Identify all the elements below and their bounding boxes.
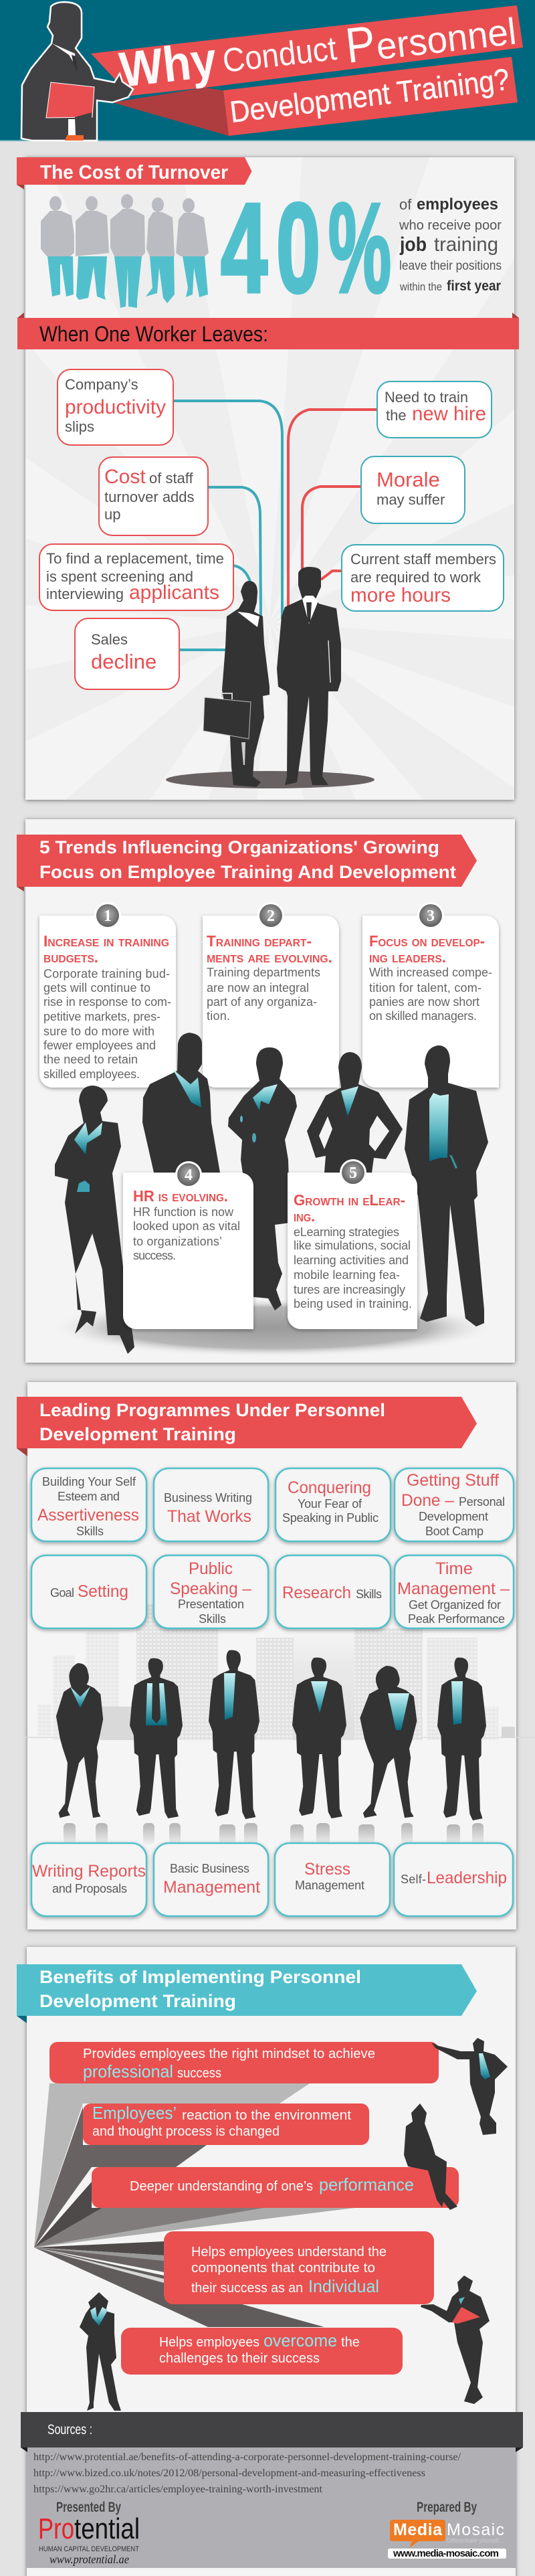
card 5: growth in eLearning: tures are increasingly (294, 1283, 405, 1296)
card 3: focus on developing leaders: tition for talent, com- (369, 981, 481, 995)
number badge 1: 1 (104, 908, 112, 925)
section heading: five trends: Focus on Employee Training And Development (39, 862, 456, 882)
number badge 4: 4 (185, 1167, 193, 1184)
benefit bar: employees reaction (83, 2103, 369, 2145)
callout: more hours: more hours (350, 584, 451, 606)
big statistic: 40 percent: 0 (276, 177, 320, 319)
callout: applicants: applicants (129, 582, 219, 604)
card 4: HR is evolving: to organizations’ (133, 1235, 222, 1248)
benefit bar: individual: Individual (308, 2276, 379, 2296)
figure: woman with folded arms (228, 1047, 297, 1310)
programme tile: stress management: Stress (304, 1860, 350, 1879)
programme tile: getting stuff done: Done – (401, 1491, 454, 1510)
silhouette: woman bottom left (80, 2292, 121, 2411)
figure: man behind cards (142, 1033, 220, 1173)
programme tile: self-leadership: Self- (401, 1873, 426, 1886)
programme tile: conquering fear: Your Fear of (298, 1497, 362, 1511)
card 2: training departments: Training depart- (207, 932, 312, 950)
callout: cost of staff turnover: Cost (104, 466, 146, 488)
programme tile: public speaking (154, 1555, 268, 1628)
card 1: increase in training budgets: skilled employees. (43, 1067, 140, 1081)
stat caption: of (399, 196, 412, 213)
silhouette: man leaning on bar (431, 2038, 508, 2135)
benefit bar: employees reaction: reaction to the environment (182, 2108, 351, 2123)
source links: http://www.bized.co.uk/notes/2012/08/personal-development-and-measuring-effectiveness (33, 2468, 425, 2479)
programme tile: assertiveness: Skills (76, 1525, 104, 1538)
card 4: HR is evolving: looked upon as vital (133, 1219, 240, 1233)
section heading: leading programmes: Leading Programmes Under Personnel (39, 1400, 385, 1420)
card 4: HR is evolving (123, 1161, 253, 1329)
programme tile: goal setting: Goal (50, 1586, 74, 1600)
figure 6 man (437, 1658, 486, 1820)
title text: Conduct (221, 29, 338, 80)
card 1: increase in training budgets: Corporate training bud- (43, 967, 170, 980)
benefit bar: overcome (121, 2328, 403, 2375)
card 2: training departments: ments are evolving. (207, 948, 332, 966)
programme tile: getting stuff done: Development (419, 1510, 488, 1523)
stat caption: within the (399, 280, 442, 293)
number badge 2 (257, 902, 284, 929)
figure: woman hands on hips (307, 1052, 403, 1173)
card 1: increase in training budgets: Increase in training (43, 932, 169, 950)
programme tile: self-leadership: Leadership (427, 1869, 507, 1887)
card 5: growth in eLearning: learning activities and (294, 1254, 409, 1267)
card 5: growth in eLearning: being used in training. (294, 1297, 412, 1310)
callout: productivity: Company’s (65, 376, 138, 393)
card 4: HR is evolving: success. (133, 1249, 176, 1262)
stat caption: who receive poor (399, 218, 502, 233)
programme tile: stress management: Management (295, 1879, 364, 1892)
prepared by logo (388, 2500, 506, 2559)
benefit bar: employees reaction: Employees’ (92, 2103, 177, 2123)
programme tile: getting stuff done (395, 1468, 514, 1541)
card 2: training departments: tion. (207, 1009, 230, 1023)
callout: new hire: new hire (412, 403, 486, 425)
programme tile: assertiveness: Esteem and (58, 1490, 120, 1503)
callout: morale: Morale (377, 468, 440, 491)
source links (33, 2452, 461, 2495)
number badge 5: 5 (349, 1165, 357, 1182)
programme tile: assertiveness: Assertiveness (37, 1506, 139, 1525)
title text: ersonnel (374, 10, 518, 68)
figure 4 man (292, 1658, 346, 1818)
card 2: training departments: Training departments (207, 966, 320, 979)
big statistic: 40 percent: 4 (221, 177, 268, 319)
section heading: the cost of turnover: The Cost of Turnover (40, 162, 228, 183)
programme tile: writing reports: Writing Reports (32, 1862, 146, 1881)
benefit bar: overcome: challenges to their success (159, 2351, 320, 2366)
benefit bar: performance (92, 2167, 459, 2208)
callout: sales decline: Sales (91, 631, 128, 648)
card 4: HR is evolving: HR is evolving. (133, 1187, 228, 1205)
figure 5 woman (360, 1666, 417, 1818)
card 3: focus on developing leaders: panies are now short (369, 995, 479, 1009)
number badge 3: 3 (427, 908, 435, 925)
section heading: five trends (17, 835, 477, 891)
sources bar: Sources : (47, 2422, 92, 2437)
card 1: increase in training budgets: rise in response to com- (43, 995, 171, 1009)
presented by logo: HUMAN CAPITAL DEVELOPMENT (39, 2545, 139, 2553)
programme tile: assertiveness: Building Your Self (42, 1475, 136, 1488)
callout: new hire (377, 381, 492, 438)
programme tile: business management (154, 1843, 268, 1916)
big statistic: 40 percent: % (328, 177, 391, 319)
callout: sales decline (75, 618, 179, 689)
icon: presenter man with folder (21, 2, 133, 141)
programme tile: time management: Get Organized for (409, 1598, 501, 1612)
callout: more hours: are required to work (350, 569, 481, 586)
presented by logo: tential (74, 2512, 140, 2545)
callout: morale: may suffer (377, 491, 445, 508)
programme tile: research skills (276, 1555, 391, 1628)
programme tile: conquering fear: Speaking in Public (282, 1511, 379, 1525)
benefit bar: individual: components that contribute to (191, 2261, 375, 2276)
benefit bar: professional success: professional (83, 2061, 173, 2081)
card 2: training departments: are now an integral (207, 981, 309, 995)
illustration: six professionals with reflections (56, 1650, 486, 1844)
callout: new hire: Need to train (385, 389, 468, 406)
callout: cost of staff turnover (99, 457, 208, 535)
programme tile: getting stuff done: Getting Stuff (407, 1471, 499, 1490)
footer grey area (21, 2412, 523, 2568)
figure 2 man (130, 1658, 183, 1818)
section heading: leading programmes: Development Training (39, 1424, 236, 1444)
programme tile: time management: Peak Performance (408, 1612, 505, 1626)
source links: https://www.go2hr.ca/articles/employee-training-worth-investment (33, 2484, 323, 2495)
figure 3 man (209, 1650, 259, 1819)
illustration: man and woman standing (166, 567, 374, 788)
title text (116, 10, 518, 129)
panel: leading programmes background (27, 1382, 516, 1929)
callout: applicants (39, 544, 233, 610)
programme tile: goal setting (31, 1555, 146, 1628)
programme tile: assertiveness (31, 1468, 146, 1541)
programme tile: writing reports: and Proposals (52, 1882, 127, 1895)
callout: applicants: is spent screening and (46, 568, 193, 585)
card 5: growth in eLearning: eLearning strategies (294, 1225, 399, 1239)
fan of grey wedges (34, 2083, 354, 2327)
card 1: increase in training budgets: fewer employees and (43, 1039, 156, 1052)
card 5: growth in eLearning (288, 1159, 417, 1329)
benefit bar: overcome: overcome (263, 2330, 337, 2350)
panel: benefits background (27, 1947, 516, 2576)
programme tile: stress management (275, 1843, 390, 1916)
programme tile: business writing: Business Writing (164, 1491, 252, 1505)
programme tile: public speaking: Presentation (178, 1598, 244, 1611)
title text: P (342, 15, 379, 74)
callout: cost of staff turnover: up (104, 506, 120, 523)
benefit bar: employees reaction: and thought process is changed (92, 2124, 280, 2139)
section heading: five trends: 5 Trends Influencing Organizations' Growing (39, 837, 439, 857)
programme tile: business writing (154, 1468, 268, 1541)
prepared by logo: Differentiate yourself... (447, 2537, 504, 2544)
stat caption: first year (447, 278, 501, 294)
section heading: benefits: Development Training (39, 1991, 236, 2011)
card 1: increase in training budgets: the need to retain (43, 1053, 138, 1066)
section heading: benefits: Benefits of Implementing Personnel (39, 1967, 361, 1987)
section heading: leading programmes (17, 1397, 477, 1456)
benefit bar: performance: Deeper understanding of one’s (130, 2179, 313, 2194)
programme tile: public speaking: Skills (199, 1612, 226, 1626)
number badge 1 (94, 902, 121, 929)
card 3: focus on developing leaders: ing leaders. (369, 948, 446, 966)
programme tile: goal setting: Setting (78, 1582, 128, 1601)
man in suit (277, 567, 341, 785)
card 3: focus on developing leaders: on skilled managers. (369, 1009, 477, 1023)
section heading: the cost of turnover (17, 157, 251, 189)
card 3: focus on developing leaders (362, 902, 499, 1088)
prepared by logo: www.media-mosaic.com (393, 2548, 499, 2559)
card 5: growth in eLearning: mobile learning fea- (294, 1268, 400, 1282)
programme tile: conquering fear: Conquering (288, 1478, 371, 1497)
benefit bar: professional success: Provides employees the right mindset to achieve (83, 2047, 375, 2061)
benefit bar: individual: Helps employees understand the (191, 2245, 387, 2259)
programme tile: getting stuff done: Personal (459, 1495, 505, 1509)
stat caption: training (434, 234, 498, 256)
callout: sales decline: decline (91, 650, 156, 673)
programme tile: writing reports (31, 1843, 146, 1916)
programme tile: self-leadership (394, 1843, 513, 1916)
figure 1 woman (56, 1663, 103, 1818)
header band (0, 0, 535, 141)
presented by logo (38, 2500, 140, 2566)
icon: group of five workers (41, 194, 209, 308)
prepared by logo: Prepared By (417, 2500, 477, 2515)
programme tile: business writing: That Works (167, 1507, 251, 1526)
benefit bar: professional success (49, 2042, 439, 2083)
card 2: training departments: part of any organiza- (207, 995, 317, 1009)
callout: productivity: slips (65, 418, 94, 435)
number badge 4 (175, 1161, 202, 1188)
presented by logo: www.protential.ae (49, 2553, 129, 2566)
heading bar: when one worker leaves: When One Worker Leaves: (39, 322, 268, 346)
programme tile: public speaking: Speaking – (170, 1579, 251, 1598)
benefit bar: professional success: success (177, 2066, 221, 2081)
programme tile: public speaking: Public (189, 1559, 233, 1578)
number badge 5 (340, 1159, 366, 1186)
callout: new hire: the (386, 407, 407, 424)
presented by logo: Pro (38, 2512, 74, 2545)
sources bar (21, 2412, 523, 2452)
card 1: increase in training budgets: petitive markets, pres- (43, 1010, 160, 1023)
panel: five trends background (25, 819, 515, 1363)
callout: applicants: To find a replacement, time (46, 550, 224, 567)
card 2: training departments (203, 902, 339, 1088)
title text: Development Training? (228, 62, 511, 129)
figure: tall man right (405, 1045, 488, 1326)
programme tile: time management: Time (435, 1559, 473, 1578)
callout: cost of staff turnover: of staff (149, 470, 194, 487)
callout: applicants: interviewing (46, 586, 124, 602)
programme tile: research skills: Skills (356, 1587, 382, 1601)
card 1: increase in training budgets: gets will continue to (43, 981, 150, 995)
benefit bar: individual (164, 2231, 434, 2304)
programme tile: time management (395, 1555, 514, 1628)
silhouette: seated woman (404, 2103, 457, 2210)
card 3: focus on developing leaders: Focus on develop- (369, 932, 485, 950)
benefit bar: individual: their success as an (191, 2281, 303, 2296)
callout: productivity (58, 369, 173, 445)
big statistic: 40 percent (221, 177, 391, 319)
benefit bar: overcome: Helps employees (159, 2335, 259, 2350)
reflections (64, 1823, 484, 1844)
callout: more hours (342, 545, 504, 611)
title text: Why (116, 31, 219, 98)
card 1: increase in training budgets: sure to do more with (43, 1025, 154, 1038)
card 5: growth in eLearning: ing. (294, 1207, 315, 1225)
card 1: increase in training budgets: budgets. (43, 948, 98, 966)
title ribbon shapes (91, 5, 523, 136)
stat caption: employees (417, 195, 498, 213)
card 5: growth in eLearning: like simulations, social (294, 1239, 411, 1252)
number badge 2: 2 (267, 908, 275, 925)
programme tile: business management: Management (163, 1878, 260, 1897)
woman with briefcase (203, 581, 270, 787)
card 4: HR is evolving: HR function is now (133, 1205, 234, 1219)
source links: http://www.protential.ae/benefits-of-attending-a-corporate-personnel-development-training-course/ (33, 2452, 461, 2463)
stat caption: job (399, 234, 427, 256)
callout: more hours: Current staff members (350, 551, 496, 568)
stat caption: leave their positions (399, 259, 502, 273)
programme tile: research skills: Research (282, 1583, 351, 1602)
connector lines (173, 401, 377, 650)
heading bar: when one worker leaves (17, 313, 519, 349)
panel: cost of turnover background (25, 157, 514, 800)
prepared by logo: Media (393, 2520, 443, 2539)
callout: morale (361, 456, 465, 523)
card 1: increase in training budgets (39, 902, 176, 1088)
card 5: growth in eLearning: Growth in eLear- (294, 1191, 405, 1209)
silhouette: woman with red folder (421, 2276, 490, 2404)
programme tile: getting stuff done: Boot Camp (425, 1525, 484, 1538)
illustration: five business people (55, 1033, 488, 1354)
callout: cost of staff turnover: turnover adds (104, 489, 195, 505)
number badge 3 (417, 902, 444, 929)
section heading: benefits (17, 1964, 477, 2023)
programme tile: business management: Basic Business (170, 1862, 249, 1875)
floor shadow under people (49, 1298, 497, 1357)
stat caption (399, 195, 502, 294)
benefit bar: overcome: the (341, 2335, 360, 2350)
programme tile: time management: Management – (397, 1579, 510, 1598)
callout: productivity: productivity (65, 396, 166, 418)
illustration: city skyline (24, 1604, 535, 1740)
prepared by logo: Mosaic (447, 2520, 504, 2539)
figure: woman left (55, 1086, 134, 1354)
presented by logo: Presented By (56, 2500, 121, 2515)
benefit bar: performance: performance (319, 2174, 414, 2195)
programme tile: conquering fear (276, 1468, 391, 1541)
card 3: focus on developing leaders: With increased compe- (369, 966, 492, 979)
